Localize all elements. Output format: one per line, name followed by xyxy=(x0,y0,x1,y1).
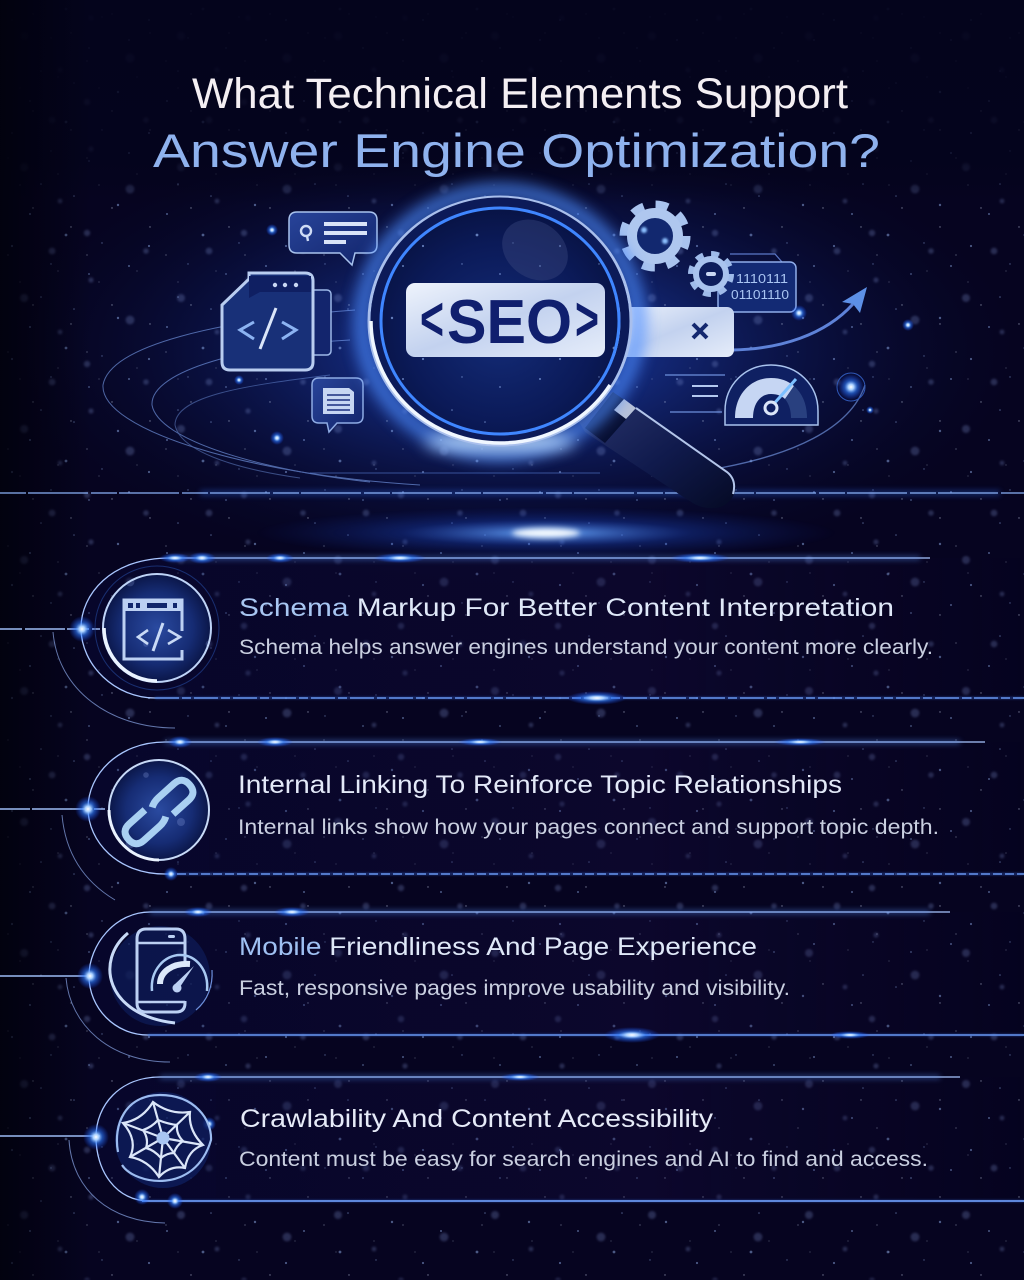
icon: binary data panel xyxy=(718,254,796,312)
glint nodes beside hero xyxy=(234,224,914,445)
hero orbit lines xyxy=(103,310,865,485)
description: Fast, responsive pages improve usability and visibility. xyxy=(239,977,790,1000)
title line 2: Answer Engine Optimization? xyxy=(153,124,880,177)
icon: code window xyxy=(222,273,331,370)
SEO label: SEO xyxy=(447,288,572,357)
glow node xyxy=(69,616,95,642)
icon: large gear xyxy=(624,205,686,267)
panel: internal linking xyxy=(0,736,1024,900)
icon: code window xyxy=(95,566,219,690)
description: Schema helps answer engines understand your content more clearly. xyxy=(239,636,933,659)
hero divider lines and flare xyxy=(0,473,1024,559)
panel outlines xyxy=(0,1077,1024,1223)
panel shape xyxy=(88,742,1024,874)
icon: chat bubble xyxy=(289,212,377,265)
heading: Schema Markup For Better Content Interpretation xyxy=(239,594,894,622)
heading: Mobile Friendliness And Page Experience xyxy=(239,933,757,961)
magnifier ring xyxy=(369,197,631,445)
title xyxy=(153,70,880,177)
SEO label: < xyxy=(420,285,444,354)
description: Content must be easy for search engines and AI to find and access. xyxy=(239,1148,928,1171)
glow nodes xyxy=(83,1117,216,1209)
description: Internal links show how your pages connect and support topic depth. xyxy=(238,816,939,839)
panel: schema markup xyxy=(0,552,1024,728)
title line 1: What Technical Elements Support xyxy=(192,70,848,118)
panel shape xyxy=(81,558,1024,698)
icon: speed gauge xyxy=(665,365,818,425)
icon: spider web xyxy=(115,1092,211,1188)
panel: crawlability xyxy=(0,1072,1024,1223)
heading: Crawlability And Content Accessibility xyxy=(240,1105,714,1133)
panel outlines xyxy=(0,558,1024,728)
search bar extension xyxy=(610,307,734,357)
icon: binary data panel: 1110111 xyxy=(736,271,788,286)
SEO label: > xyxy=(575,285,599,354)
SEO search bar xyxy=(406,283,605,357)
panel: mobile friendliness xyxy=(0,907,1024,1062)
panel outlines xyxy=(0,742,1024,900)
icon: binary data panel: 01101110 xyxy=(731,287,789,302)
icon: document bubble xyxy=(312,378,363,432)
arrow: growth curve xyxy=(733,287,867,350)
icon: small gear xyxy=(691,254,731,294)
panel shape xyxy=(96,1077,1024,1201)
panel outlines xyxy=(0,912,1024,1062)
magnifier glow xyxy=(362,191,638,453)
heading: Internal Linking To Reinforce Topic Relationships xyxy=(238,771,842,799)
glow node xyxy=(77,963,103,989)
icon: phone with gauge xyxy=(110,926,212,1026)
glow node xyxy=(75,796,101,822)
magnifying glass xyxy=(362,191,736,508)
magnifier handle xyxy=(578,392,736,508)
panel shape xyxy=(89,912,1024,1035)
icon: chain link xyxy=(108,759,210,861)
magnifier lens xyxy=(380,206,620,436)
